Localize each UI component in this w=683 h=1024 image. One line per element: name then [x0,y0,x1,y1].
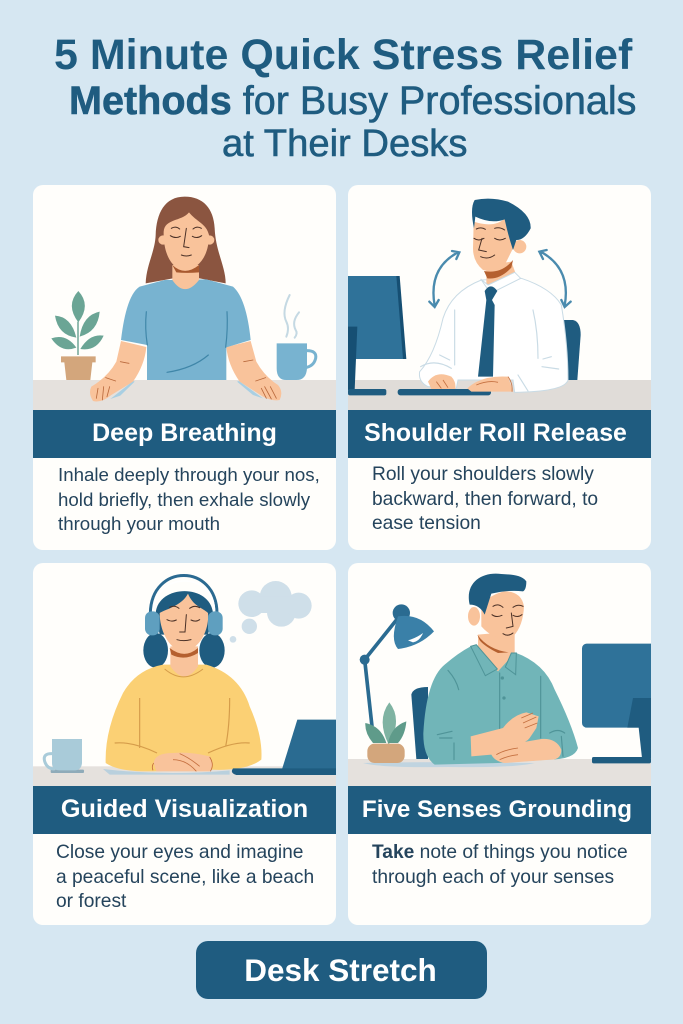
description: through each of your senses [372,866,614,888]
description: Take note of things you notice [372,842,628,863]
icon: monitor [582,644,655,763]
icon: coffee mug [277,295,316,380]
heading: Guided Visualization: Guided Visualization [61,795,308,823]
panel: shoulder roll release [348,185,651,550]
description: Inhale deeply through your nos, [58,464,320,485]
icon: plant [365,702,406,763]
arrows: shoulder rolls [429,250,571,307]
icon: desk lamp [360,604,434,726]
title: Methods for Busy Professionals [69,79,636,123]
heading: Five Senses Grounding [348,786,651,834]
heading: Guided Visualization [33,786,336,834]
description: Roll your shoulders slowly [372,464,594,485]
description: ease tension [372,513,481,534]
description: Close your eyes and imagine [56,842,303,863]
icon: mug [44,739,84,773]
description [372,842,628,888]
heading: Five Senses Grounding: Five Senses Grounding [362,796,632,823]
illustration: man grounding [348,574,651,786]
description [56,842,314,912]
title: at Their Desks [222,122,467,165]
panel: deep breathing [33,185,336,550]
button: Desk Stretch [196,941,487,999]
description: backward, then forward, to [372,488,598,510]
illustration: woman with headphones [33,574,336,786]
description: or forest [56,891,126,912]
panel: five senses grounding [348,563,651,925]
title: 5 Minute Quick Stress Relief [54,31,632,79]
description: hold briefly, then exhale slowly [58,488,310,510]
panel: guided visualization [33,563,336,925]
description [58,464,320,534]
illustration: woman breathing at desk [33,196,336,410]
button: Desk Stretch: Desk Stretch [244,952,437,988]
illustration: man rolling shoulders [348,198,651,410]
heading: Deep Breathing: Deep Breathing [92,419,277,447]
description: a peaceful scene, like a beach [56,866,314,888]
heading: Shoulder Roll Release [348,410,651,458]
description [372,464,598,534]
icon: laptop [232,720,336,775]
icon: plant [51,291,104,380]
icon: thought bubble [230,581,312,643]
heading: Deep Breathing [33,410,336,458]
title [54,31,636,165]
heading: Shoulder Roll Release: Shoulder Roll Release [364,419,627,447]
description: through your mouth [58,513,220,534]
